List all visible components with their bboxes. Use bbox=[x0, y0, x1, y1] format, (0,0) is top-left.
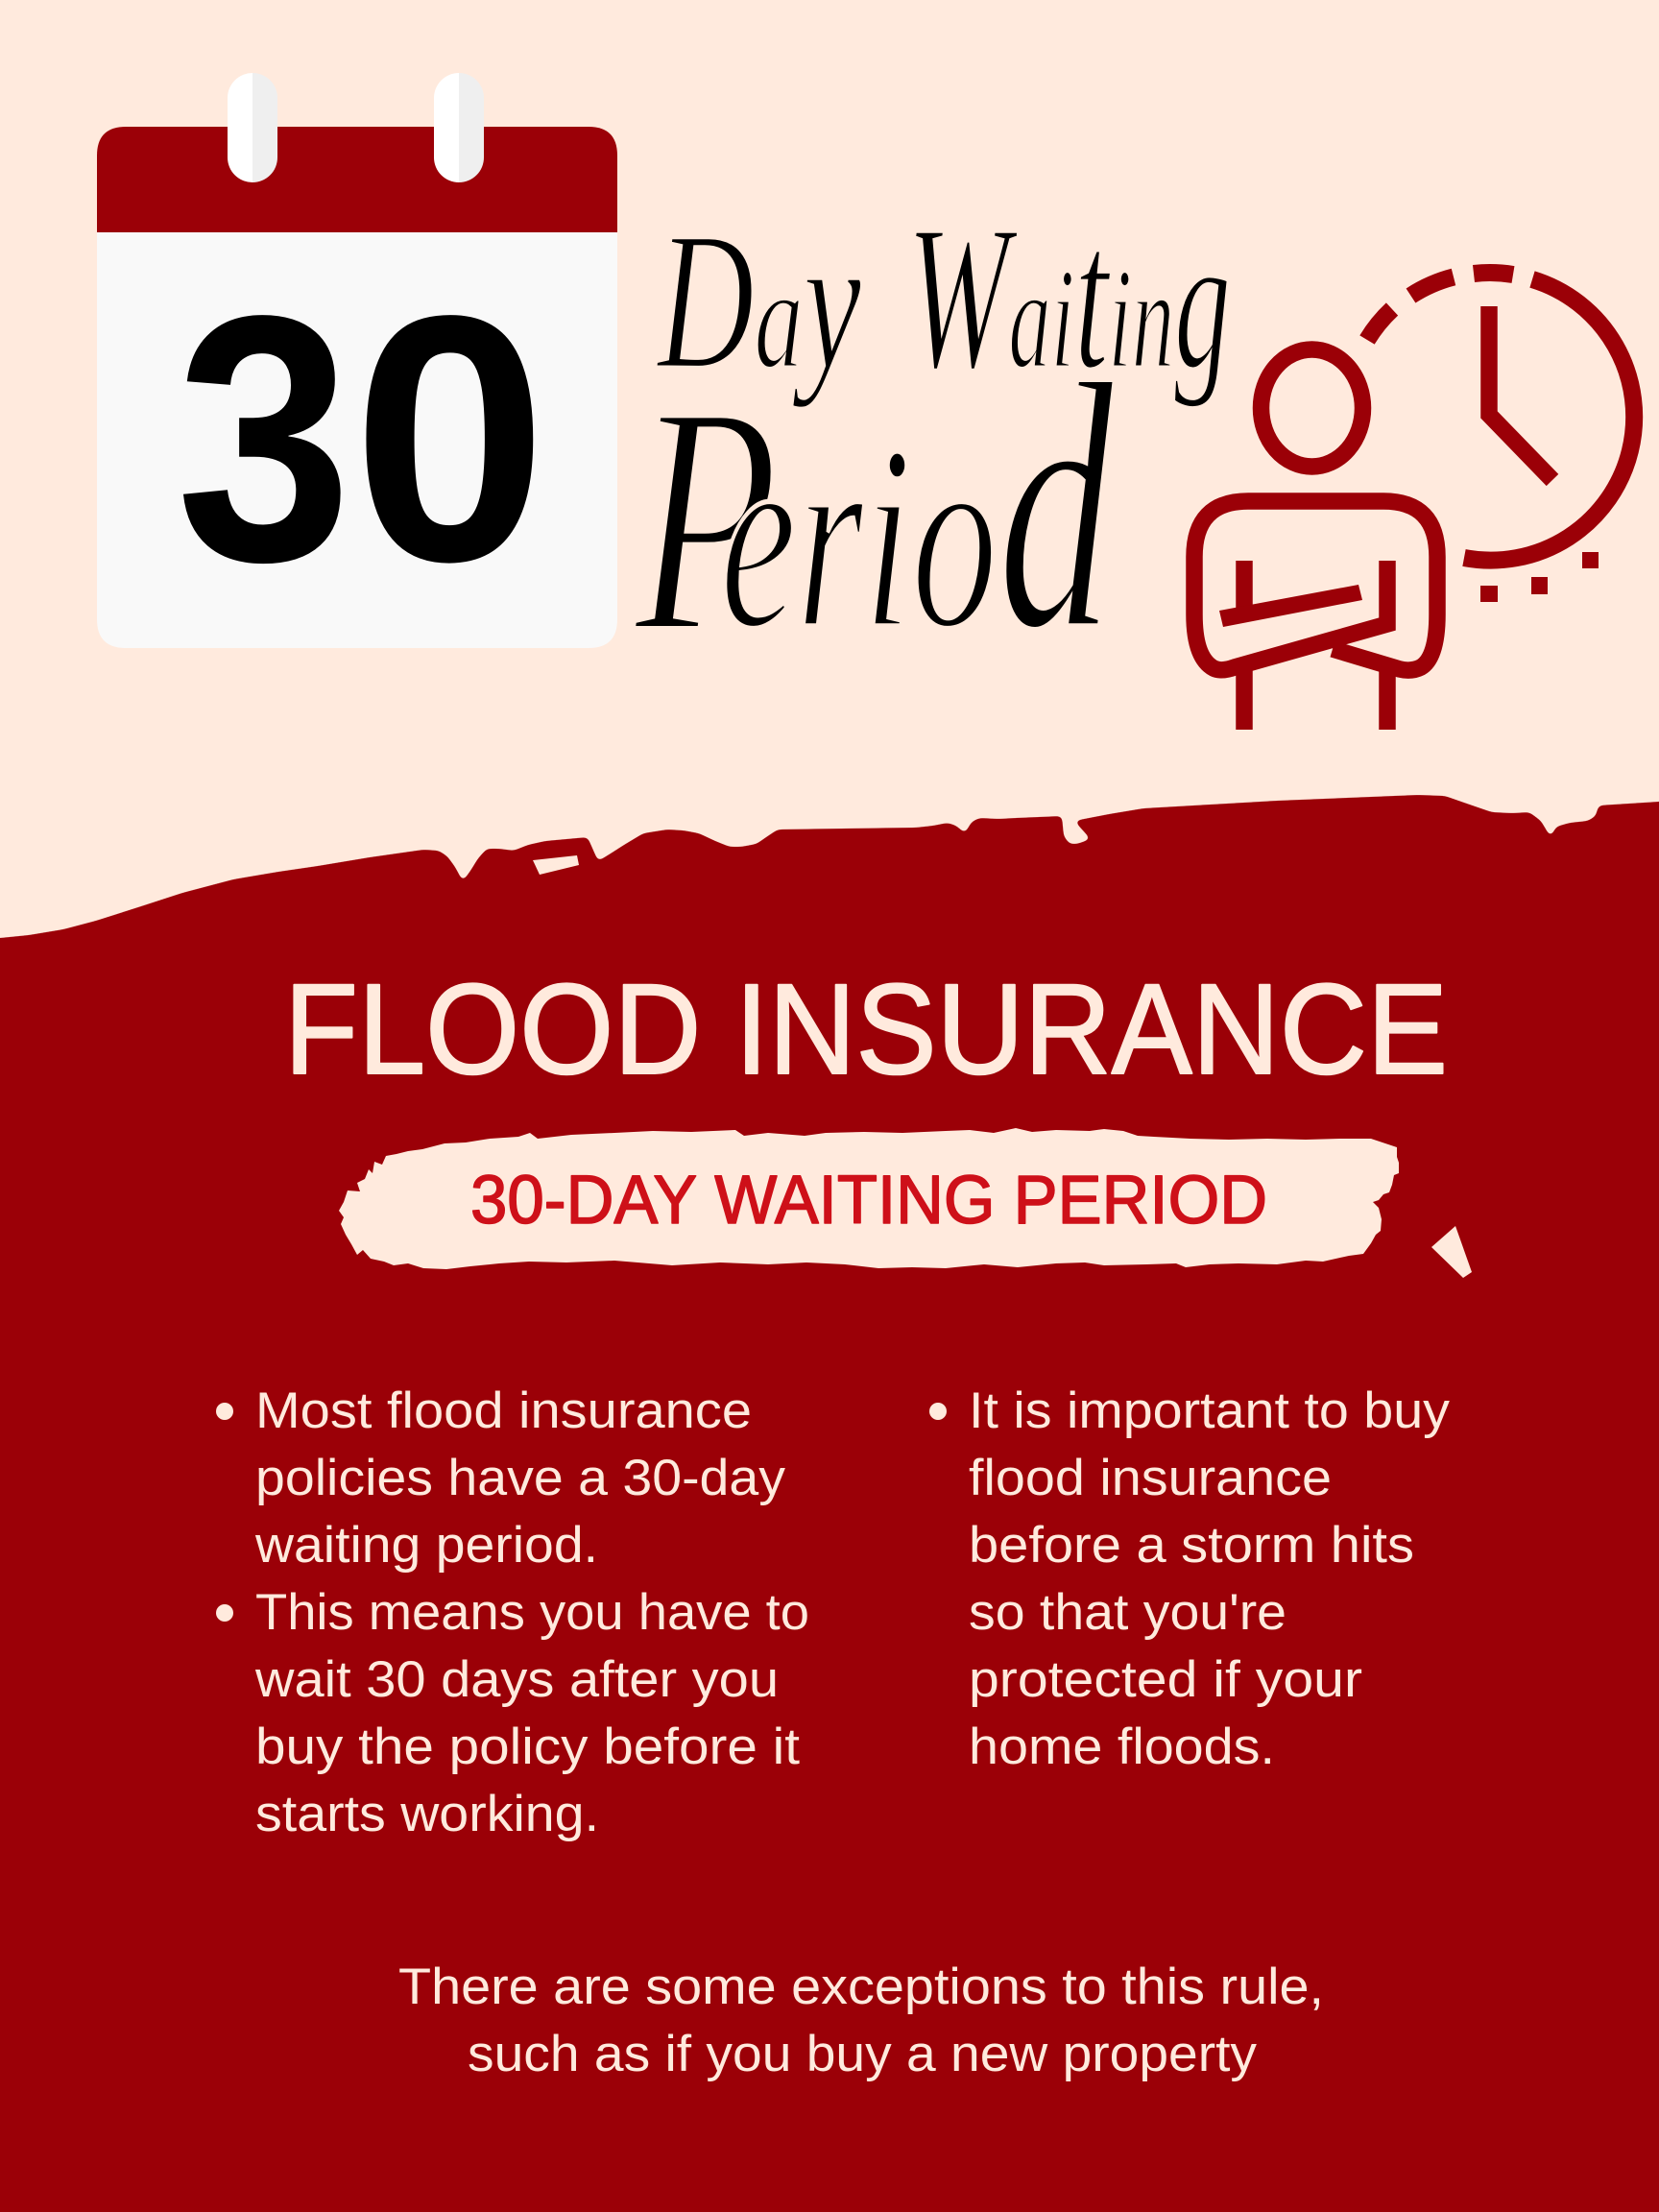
text block: exceptions note: There are some exceptions to this rule, bbox=[398, 1959, 1324, 2015]
calendar ring right bbox=[434, 73, 484, 182]
calendar number: 3 bbox=[176, 242, 352, 635]
bullet two: This means you have to bbox=[255, 1584, 809, 1641]
bullet two: wait 30 days after you bbox=[254, 1651, 779, 1708]
bullet one bbox=[216, 1382, 786, 1574]
forearm bar bbox=[1219, 585, 1362, 627]
panel: calendar bbox=[97, 73, 617, 648]
clock dots bbox=[1480, 552, 1599, 602]
calendar number bbox=[176, 242, 547, 635]
calendar ring left bbox=[228, 73, 277, 182]
bullet two: starts working. bbox=[255, 1786, 599, 1842]
bullet two bbox=[216, 1584, 809, 1842]
bullet one: policies have a 30-day bbox=[255, 1450, 786, 1506]
script letter: P: P bbox=[631, 338, 779, 700]
legs bbox=[1244, 670, 1387, 730]
script word: Waiting: Waiting bbox=[907, 182, 1231, 412]
text block: right column bullet: before a storm hits bbox=[969, 1517, 1414, 1574]
text block: exceptions note bbox=[398, 1959, 1324, 2082]
text block: right column bullet: It is important to buy bbox=[969, 1382, 1451, 1439]
brush stroke shape bbox=[339, 1128, 1399, 1269]
text block: right column bullet: protected if your bbox=[969, 1651, 1362, 1708]
banner chip bbox=[1431, 1226, 1472, 1278]
script letters: eriod: eriod bbox=[720, 310, 1118, 704]
text block: right column bullet bbox=[929, 1382, 1451, 1775]
bullet one: Most flood insurance bbox=[255, 1382, 752, 1439]
calendar number: 0 bbox=[352, 243, 547, 635]
text block: right column bullet: home floods. bbox=[969, 1719, 1275, 1775]
text block: exceptions note: such as if you buy a new property bbox=[468, 2026, 1258, 2082]
subtitle banner bbox=[339, 1128, 1399, 1269]
person head bbox=[1262, 349, 1363, 467]
panel: red wave section bbox=[0, 795, 1659, 2212]
bullet two: buy the policy before it bbox=[255, 1719, 800, 1775]
heading: flood insurance: FLOOD INSURANCE bbox=[284, 958, 1448, 1101]
script title bbox=[631, 182, 1231, 704]
clock arc bbox=[1464, 279, 1634, 561]
wave chip bbox=[533, 855, 579, 875]
left arm upright bbox=[1236, 561, 1253, 609]
calendar page bbox=[97, 232, 617, 648]
person body and crossed arms bbox=[1194, 501, 1437, 670]
icon: person waiting with clock bbox=[1194, 273, 1634, 730]
text block: right column bullet: flood insurance bbox=[969, 1450, 1332, 1506]
clock hands bbox=[1489, 306, 1552, 480]
text block: right column bullet: so that you're bbox=[969, 1584, 1286, 1641]
script word: Day: Day bbox=[656, 192, 861, 410]
bullet one: waiting period. bbox=[254, 1517, 598, 1574]
clock dashes bbox=[1367, 273, 1513, 340]
text block: left column bullets bbox=[216, 1382, 809, 1842]
subtitle text: 30-DAY WAITING PERIOD bbox=[470, 1163, 1267, 1238]
calendar header bbox=[97, 127, 617, 232]
